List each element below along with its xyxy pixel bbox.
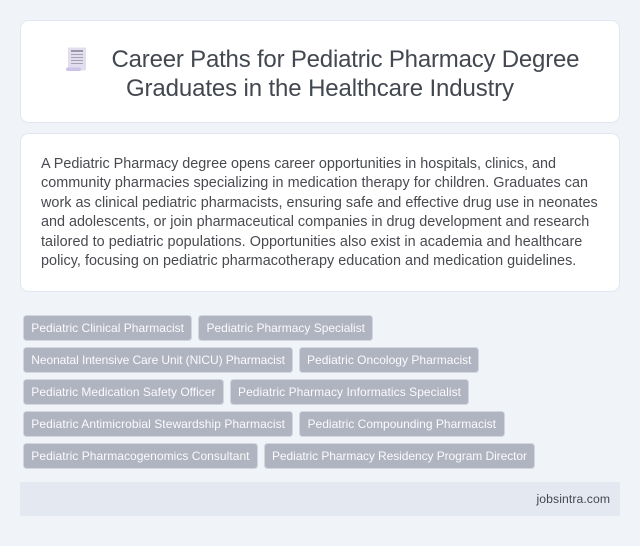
tag: Pediatric Pharmacogenomics Consultant <box>31 449 250 463</box>
tag <box>24 380 224 404</box>
tag <box>300 412 504 436</box>
tag <box>264 444 534 468</box>
tag: Pediatric Medication Safety Officer <box>31 385 215 399</box>
tag <box>24 348 292 372</box>
tag: Pediatric Pharmacy Residency Program Director <box>272 449 527 463</box>
title: Career Paths for Pediatric Pharmacy Degree <box>112 46 580 73</box>
footer source text: jobsintra.com <box>536 492 610 506</box>
tag: Pediatric Pharmacy Informatics Specialist <box>238 385 462 399</box>
title: Graduates in the Healthcare Industry <box>126 75 514 102</box>
tag: Pediatric Pharmacy Specialist <box>206 321 366 335</box>
tag <box>198 316 372 340</box>
tag: Pediatric Antimicrobial Stewardship Pharmacist <box>31 417 286 431</box>
tag: Pediatric Clinical Pharmacist <box>31 321 185 335</box>
text block: description: tailored to pediatric populations. Opportunities also exist in academia and healthcare <box>41 234 582 250</box>
tag <box>24 412 292 436</box>
tag list: career paths <box>24 316 534 468</box>
icon: document scroll <box>66 48 86 71</box>
tag <box>230 380 468 404</box>
tag: Pediatric Oncology Pharmacist <box>307 353 472 367</box>
text block: description: and adolescents, or join pharmaceutical companies in drug development and research <box>41 214 589 230</box>
text block: description: work as clinical pediatric pharmacists, ensuring safe and effective drug use in neonates <box>40 195 598 211</box>
text block: description: community pharmacies specializing in medication therapy for children. Graduates can <box>41 175 588 191</box>
tag <box>24 316 192 340</box>
title <box>112 46 580 102</box>
tag: Neonatal Intensive Care Unit (NICU) Pharmacist <box>31 353 286 367</box>
text block: description: policy, focusing on pediatric pharmacotherapy education and medication guidelines. <box>41 253 576 269</box>
text block: description <box>40 156 598 269</box>
tag <box>24 444 258 468</box>
panel: title card <box>20 20 620 122</box>
tag <box>300 348 478 372</box>
footer bar <box>20 482 620 516</box>
text block: description: A Pediatric Pharmacy degree opens career opportunities in hospitals, clinics, and <box>41 156 556 172</box>
tag: Pediatric Compounding Pharmacist <box>308 417 497 431</box>
panel: description card <box>20 134 620 292</box>
